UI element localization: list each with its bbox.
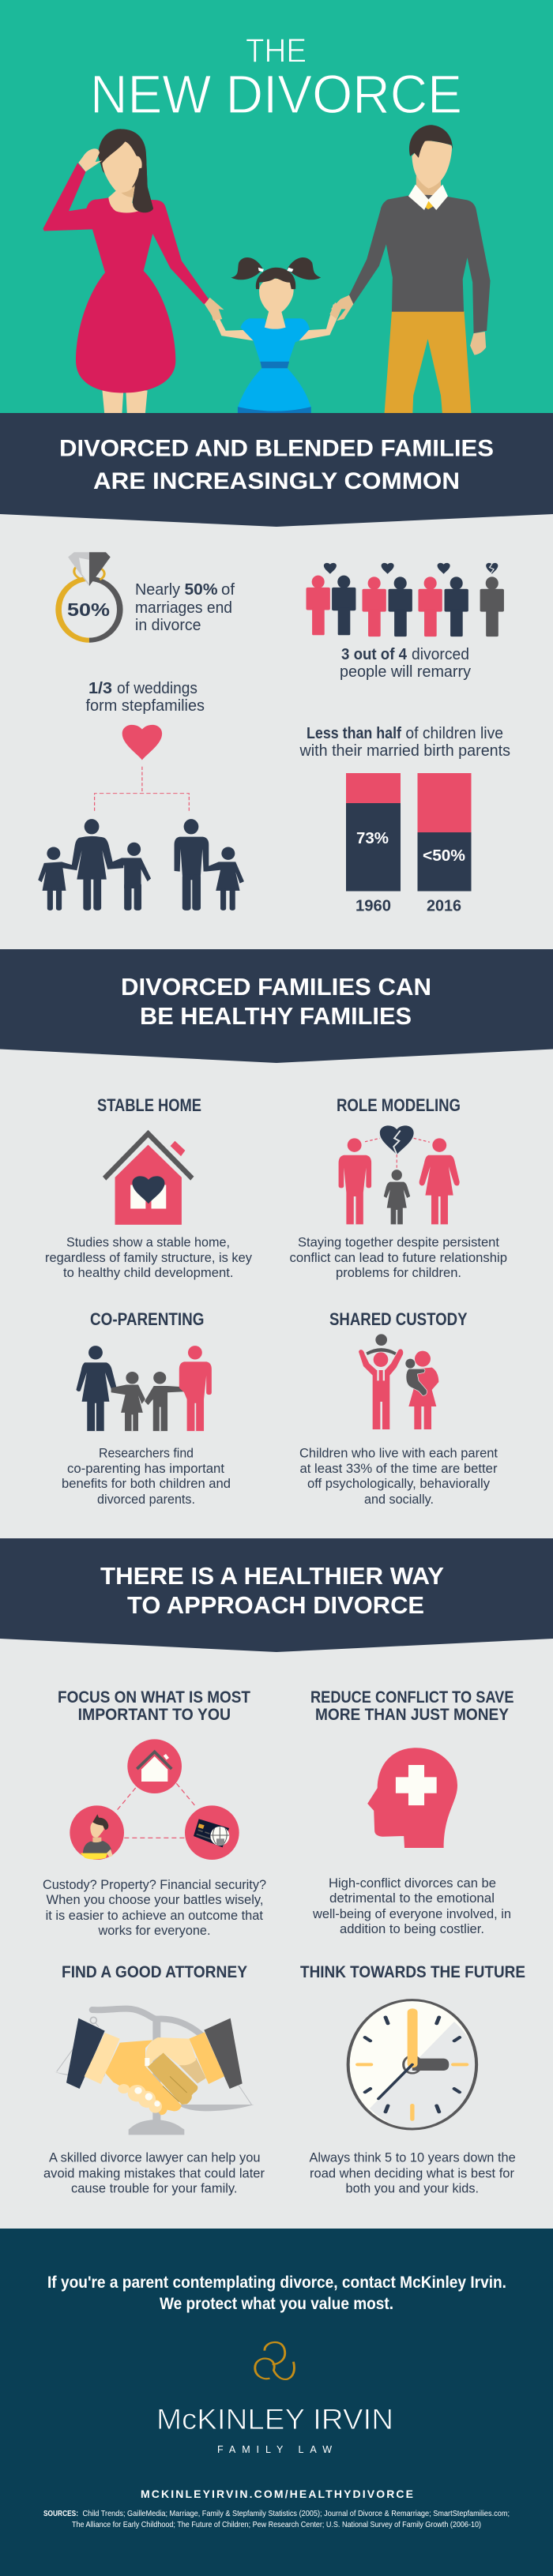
icon: custody, property, finances xyxy=(70,1739,239,1860)
text block: Researchers find xyxy=(99,1445,194,1461)
text block: conflict can lead to future relationship xyxy=(289,1250,507,1265)
text block: Staying together despite persistent xyxy=(298,1235,499,1249)
heading: THINK TOWARDS THE FUTURE xyxy=(300,1963,525,1981)
bar 1960 xyxy=(346,773,401,914)
section banner: blended families xyxy=(0,413,553,527)
bar 2016: <50% xyxy=(423,847,465,865)
section banner: blended families: DIVORCED AND BLENDED FAMILIES xyxy=(59,436,494,461)
text block: works for everyone. xyxy=(98,1923,211,1938)
text block: Always think 5 to 10 years down the xyxy=(310,2150,516,2165)
stat: remarriage xyxy=(307,563,504,681)
bar 2016 xyxy=(417,773,471,914)
section banner: healthier way: THERE IS A HEALTHIER WAY xyxy=(100,1562,444,1590)
section banner: healthier way: TO APPROACH DIVORCE xyxy=(127,1591,424,1619)
text block: in divorce xyxy=(135,617,201,634)
heading: ROLE MODELING xyxy=(337,1095,461,1115)
icon: head with medical cross xyxy=(367,1748,457,1848)
website url: MCKINLEYIRVIN.COM/HEALTHYDIVORCE xyxy=(141,2488,413,2500)
text block: co-parenting has important xyxy=(67,1461,224,1476)
text block: 1/3 xyxy=(88,680,112,697)
text block: of xyxy=(221,581,235,599)
panel: role modeling xyxy=(289,1095,507,1280)
sources: The Alliance for Early Childhood; The Future of Children; Pew Research Center; U.S. National Survey of Family Growth (2006-10) xyxy=(72,2520,481,2529)
logo mark xyxy=(255,2342,294,2379)
text block: Studies show a stable home, xyxy=(66,1235,230,1249)
text block: to healthy child development. xyxy=(63,1265,234,1280)
text block: problems for children. xyxy=(336,1265,461,1280)
section banner: healthy families xyxy=(0,949,553,1063)
logo wordmark: McKINLEY IRVIN xyxy=(156,2403,393,2435)
text block: High-conflict divorces can be xyxy=(329,1876,496,1891)
text block: of children live xyxy=(405,725,503,742)
text block: detrimental to the emotional xyxy=(329,1891,495,1906)
heading: SHARED CUSTODY xyxy=(329,1309,468,1329)
text block: cause trouble for your family. xyxy=(71,2181,237,2195)
icon: house with heart xyxy=(104,1134,192,1225)
section banner: healthier way xyxy=(0,1538,553,1652)
heading: FIND A GOOD ATTORNEY xyxy=(62,1963,247,1981)
illustration: man xyxy=(331,125,491,413)
stat: stepfamilies xyxy=(38,680,244,911)
title xyxy=(90,32,462,125)
text block: both you and your kids. xyxy=(346,2181,479,2195)
heading: MORE THAN JUST MONEY xyxy=(315,1706,509,1724)
call to action: We protect what you value most. xyxy=(160,2295,393,2313)
text block: 50% xyxy=(185,581,218,599)
panel: future xyxy=(300,1963,525,2195)
icon: people with hearts xyxy=(307,563,504,636)
logo wordmark xyxy=(156,2403,393,2455)
text block: divorced xyxy=(412,646,469,663)
icon: broken heart and parents xyxy=(339,1125,460,1224)
text block: addition to being costlier. xyxy=(340,1921,484,1936)
text block: road when deciding what is best for xyxy=(310,2165,514,2181)
text block: it is easier to achieve an outcome that xyxy=(46,1908,263,1923)
title: THE xyxy=(246,32,307,69)
heading: FOCUS ON WHAT IS MOST xyxy=(58,1688,250,1707)
text block: well-being of everyone involved, in xyxy=(312,1906,511,1921)
text block: benefits for both children and xyxy=(62,1476,231,1491)
heading: CO-PARENTING xyxy=(90,1309,204,1329)
bar 2016: 2016 xyxy=(427,897,461,914)
panel: co-parenting xyxy=(62,1309,231,1507)
call to action: If you're a parent contemplating divorce, contact McKinley Irvin. xyxy=(47,2274,506,2292)
panel: focus xyxy=(43,1688,266,1938)
text block: 3 out of 4 xyxy=(341,646,408,663)
illustration: girl xyxy=(208,257,342,413)
text block: When you choose your battles wisely, xyxy=(46,1892,264,1907)
sources: SOURCES: xyxy=(43,2509,78,2518)
text block: avoid making mistakes that could later xyxy=(43,2165,265,2181)
text block: Children who live with each parent xyxy=(299,1445,498,1461)
text block: regardless of family structure, is key xyxy=(45,1250,252,1265)
text block: divorced parents. xyxy=(97,1492,195,1507)
text block: and socially. xyxy=(364,1492,434,1507)
heading: REDUCE CONFLICT TO SAVE xyxy=(310,1688,514,1707)
bar 1960: 73% xyxy=(356,830,389,847)
panel: reduce conflict xyxy=(310,1688,514,1936)
panel: shared custody xyxy=(299,1309,498,1507)
text block: Less than half xyxy=(307,725,401,742)
icon: co-parenting family xyxy=(76,1346,212,1431)
illustration: woman xyxy=(43,129,224,413)
footer panel xyxy=(0,2229,553,2576)
heading: IMPORTANT TO YOU xyxy=(78,1706,231,1724)
text block: A skilled divorce lawyer can help you xyxy=(49,2150,261,2165)
icon: parents carrying children xyxy=(359,1334,438,1429)
text block: of weddings xyxy=(117,680,198,697)
icon: heart and two families xyxy=(38,725,244,911)
section banner: blended families: ARE INCREASINGLY COMMON xyxy=(93,468,460,494)
stat: 50% ring xyxy=(58,552,235,640)
stat: bar chart xyxy=(299,725,510,914)
stat: 50% ring: 50% xyxy=(67,599,110,620)
panel: stable home xyxy=(45,1095,252,1280)
text block: Custody? Property? Financial security? xyxy=(43,1877,266,1892)
logo wordmark: FAMILY LAW xyxy=(217,2444,332,2455)
bar 1960: 1960 xyxy=(356,897,391,914)
section banner: healthy families: BE HEALTHY FAMILIES xyxy=(140,1002,412,1030)
title: NEW DIVORCE xyxy=(90,64,462,125)
section banner: healthy families: DIVORCED FAMILIES CAN xyxy=(121,973,431,1001)
text block: form stepfamilies xyxy=(85,697,205,715)
icon: handshake over scales xyxy=(54,2009,254,2135)
text block: people will remarry xyxy=(340,663,471,681)
icon: wedding ring xyxy=(58,552,120,640)
panel: attorney xyxy=(43,1963,265,2195)
heading: STABLE HOME xyxy=(97,1095,201,1115)
text block: with their married birth parents xyxy=(299,742,510,760)
text block: at least 33% of the time are better xyxy=(300,1461,498,1476)
text block: marriages end xyxy=(135,599,232,617)
icon: clock xyxy=(348,2000,476,2129)
text block: off psychologically, behaviorally xyxy=(307,1476,490,1491)
hero panel xyxy=(0,0,553,415)
text block: Nearly xyxy=(135,581,180,599)
